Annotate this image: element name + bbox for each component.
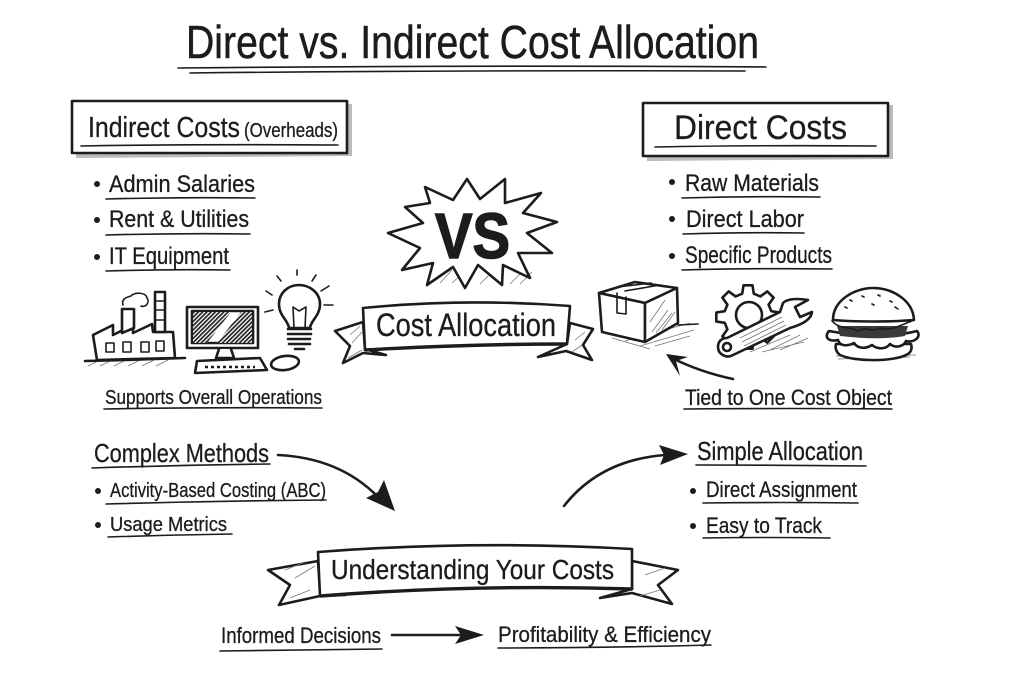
list: direct costs items: Specific Products [685, 242, 832, 269]
list: complex methods: Usage Metrics [110, 514, 227, 536]
banner: understanding your costs [268, 545, 678, 605]
icon: factory [85, 292, 185, 366]
list: simple allocation: Simple Allocation [697, 436, 863, 466]
icon: cardboard box [599, 282, 698, 349]
icon: computer [187, 307, 300, 373]
arrow: decisions to profitability [392, 626, 484, 644]
arrow: tied to box [666, 354, 733, 379]
list: indirect costs items [94, 171, 255, 271]
icon: VS starburst: VS [435, 200, 510, 272]
icon: VS starburst [388, 179, 557, 288]
arrow: understanding to simple allocation [564, 445, 688, 506]
list: direct costs items [669, 170, 832, 270]
panel: direct costs heading: Direct Costs [674, 109, 847, 147]
panel: indirect costs heading: Indirect Costs [88, 112, 240, 144]
list: complex methods: Activity-Based Costing (ABC) [110, 480, 326, 502]
list: indirect costs items: Admin Salaries [109, 171, 255, 198]
list: direct costs items: Raw Materials [685, 170, 819, 197]
icon: light bulb [265, 270, 333, 349]
text: informed decisions: Informed Decisions [221, 623, 381, 648]
list: complex methods [92, 438, 326, 537]
list: simple allocation: Direct Assignment [706, 477, 857, 502]
list: direct costs items: Direct Labor [686, 206, 804, 233]
arrow: complex methods to understanding [278, 455, 395, 511]
panel: direct costs heading [643, 103, 893, 161]
list: simple allocation [690, 436, 866, 538]
panel: indirect costs heading [72, 101, 352, 158]
text: profitability and efficiency: Profitability & Efficiency [498, 622, 711, 647]
list: indirect costs items: IT Equipment [109, 243, 229, 270]
banner: cost allocation: Cost Allocation [376, 307, 556, 343]
panel: indirect costs heading: (Overheads) [244, 120, 338, 142]
banner: cost allocation [335, 302, 593, 363]
banner: understanding your costs: Understanding Your Costs [331, 554, 614, 585]
list: complex methods: Complex Methods [94, 438, 269, 468]
text: supports overall operations: Supports Overall Operations [105, 387, 322, 409]
list: simple allocation: Easy to Track [706, 513, 823, 538]
text: tied to one cost object: Tied to One Cost Object [685, 385, 892, 410]
list: indirect costs items: Rent & Utilities [109, 206, 249, 233]
title: Direct vs. Indirect Cost Allocation [186, 16, 759, 68]
icon: gear and wrench [716, 285, 812, 356]
icon: burger [827, 288, 919, 360]
